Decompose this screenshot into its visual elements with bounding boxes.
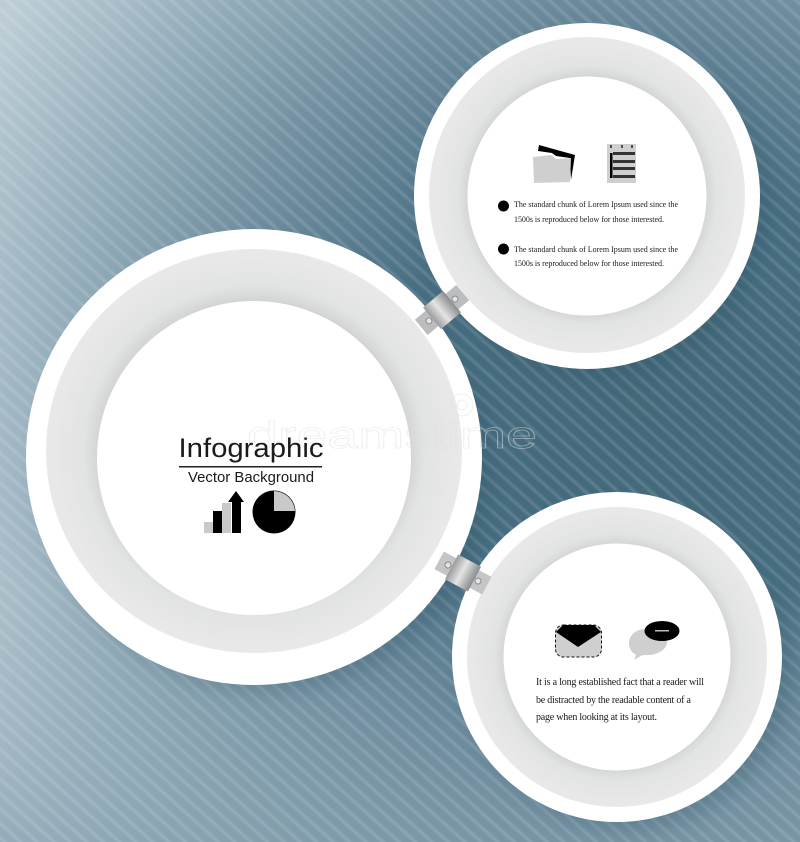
clip: top connector (412, 282, 472, 338)
subtitle: Vector Background (188, 469, 314, 486)
paragraph: be distracted by the readable content of a (536, 695, 692, 706)
icon: envelope (556, 625, 602, 657)
icon: pie chart (252, 490, 296, 534)
bullet text 1 (498, 200, 678, 224)
bullet text 2 (498, 244, 678, 268)
paragraph: It is a long established fact that a reader will (536, 677, 704, 688)
bullet text 1: The standard chunk of Lorem Ipsum used since the (514, 200, 678, 209)
bullet text 2: The standard chunk of Lorem Ipsum used since the (514, 245, 678, 254)
watermark: dreamstime (247, 415, 537, 457)
panel: top right circle (414, 23, 760, 369)
title: Infographic (178, 433, 324, 463)
paragraph: page when looking at its layout. (536, 712, 657, 723)
watermark (247, 394, 537, 457)
bullet text 2: 1500s is reproduced below for those interested. (514, 259, 664, 268)
icon: notepad (607, 144, 636, 183)
icon: bar chart with arrow (204, 491, 244, 533)
icon: folder (533, 145, 575, 183)
paragraph (536, 677, 704, 723)
panel: bottom right circle (452, 492, 782, 822)
clip: bottom connector (433, 548, 493, 598)
panel: large circle (26, 229, 537, 685)
bullet text 1: 1500s is reproduced below for those interested. (514, 215, 664, 224)
icon: speech bubbles (629, 621, 680, 660)
